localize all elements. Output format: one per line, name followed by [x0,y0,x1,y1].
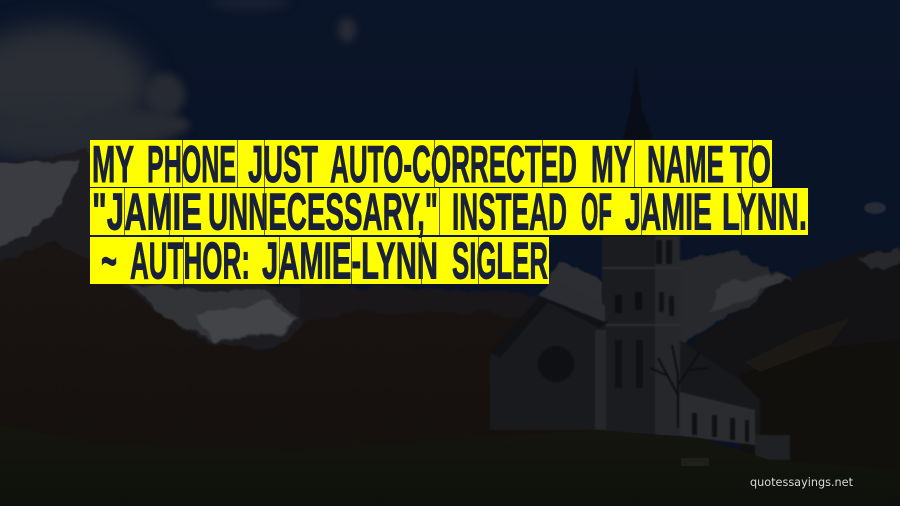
tower [602,236,680,436]
watermark: quotessayings.net [750,475,853,489]
quote line 1: JUST [248,136,318,194]
nave [490,290,606,430]
quote line 2: JAMIE [625,184,712,242]
quote line 2: INSTEAD [452,184,567,242]
foreground meadow [0,425,900,506]
quote line 1: TO [730,136,771,194]
church [490,66,790,460]
quote line 1: MY [92,136,134,194]
quote line 2: OF [581,184,612,242]
quote highlight block: SIGLER [452,232,548,290]
quote highlight block [90,136,808,290]
far mountains [0,150,900,400]
author attribution line: AUTHOR: [130,232,250,290]
quote line 2: LYNN. [722,184,807,242]
quote line 1: AUTO-CORRECTED [330,136,577,194]
bare tree [650,345,708,428]
quote line 1: NAME [647,136,724,194]
quote line 2: "JAMIE [92,184,202,242]
author attribution line: JAMIE-LYNN [262,232,438,290]
quote line 2: UNNECESSARY," [208,184,438,242]
right wing [680,340,760,440]
right dark hillside [740,340,900,506]
author attribution line: ~ [101,232,117,290]
highlight seam lines [124,140,752,284]
yellow highlight bands [90,140,808,284]
quote line 1: MY [591,136,632,194]
left brown hillside [0,243,620,506]
spire [602,66,655,240]
quote line 1: PHONE [147,136,236,194]
clouds [0,0,886,214]
